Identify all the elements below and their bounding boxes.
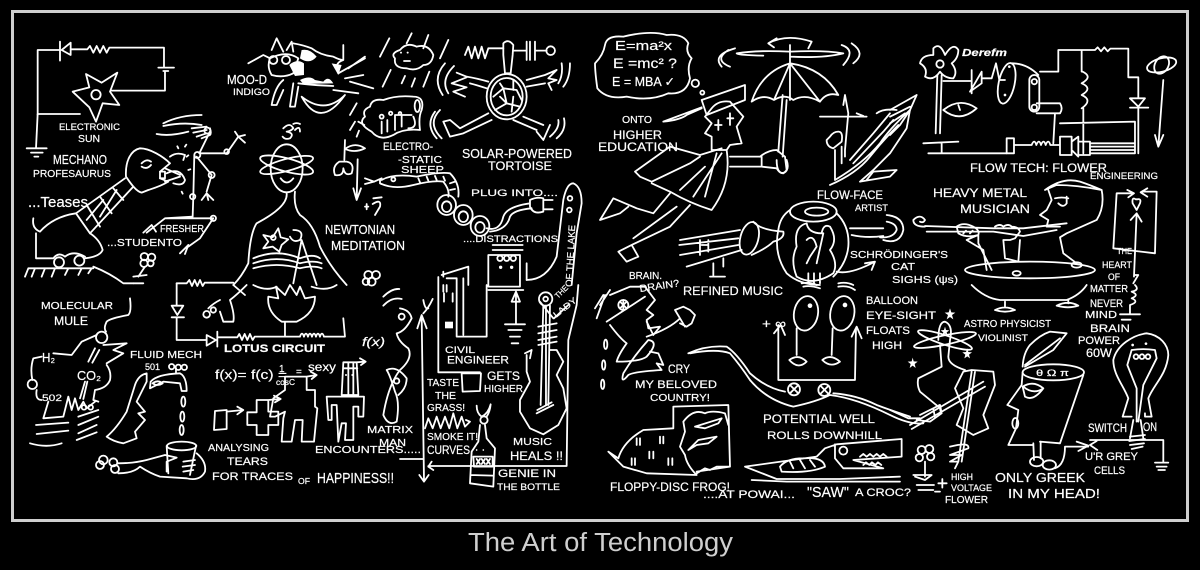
label: fluid mech: FLUID MECH	[130, 349, 202, 361]
label: high voltage flower: HIGH	[951, 472, 973, 482]
label: the heart of matter never mind: OF	[1108, 272, 1120, 283]
label: equations: E = MBA ✓	[612, 75, 675, 89]
panel: electronic sun	[27, 42, 174, 157]
icon: light bulb	[1090, 333, 1168, 470]
label: schrodinger's cat sighs: CAT	[891, 262, 915, 273]
label: electro-static sheep: -STATIC	[398, 155, 442, 166]
icon: cow	[248, 38, 373, 113]
panel: molecular mule	[28, 253, 155, 446]
panel: only greek in my head	[995, 332, 1100, 501]
label: genie in the bottle: THE BOTTLE	[497, 482, 560, 492]
label: teases: ...Teases	[28, 194, 88, 211]
icon: mule	[28, 298, 131, 446]
icon: lotus circuit wiring	[172, 280, 345, 347]
label: the heart of matter never mind: MATTER	[1090, 284, 1128, 295]
label: plus infinity: + ∞	[762, 316, 786, 331]
icon: flower circuit	[920, 46, 1178, 157]
panel: heart of matter	[1078, 188, 1157, 360]
label: mechano profesaurus: PROFESAURUS	[33, 168, 111, 180]
icon: snake plug	[365, 173, 553, 236]
icon: third figure	[270, 372, 317, 442]
panel: fluid mech	[96, 349, 394, 487]
label: music heals: HEALS !!	[510, 451, 563, 463]
label: at powai saw a croc	[703, 485, 911, 501]
label: astro physicist violinist: ASTRO PHYSICIST	[964, 319, 1051, 330]
panel: floppy-disc frog	[608, 405, 730, 494]
label: mood indigo	[227, 73, 270, 98]
label: analysing tears: TEARS	[227, 456, 268, 468]
icon: umbrella copter	[719, 38, 860, 173]
label: the heart of matter never mind: THE	[1117, 247, 1132, 256]
icon: matrix transformations	[214, 396, 281, 435]
label: brain drain: BRAIN.	[629, 270, 662, 282]
label: schrodinger's cat sighs: SIGHS (ψs)	[892, 274, 958, 286]
icon: star circuit	[27, 42, 174, 157]
label: of happiness	[298, 471, 394, 487]
label: civil engineer gets higher: CIVIL	[445, 345, 475, 355]
icon: small arrow	[837, 262, 875, 272]
label: electronic sun: ELECTRONIC	[59, 122, 120, 133]
label: flow tech flower engineering: FLOW TECH: FLOWER	[970, 163, 1107, 175]
label: brain power 60w	[1078, 323, 1130, 360]
label: balloon eye-sight floats high	[866, 295, 936, 352]
label: the heart of matter never mind: MIND	[1085, 310, 1117, 321]
label: flow-face artist	[817, 190, 888, 214]
label: taste the grass: SMOKE IT!	[427, 432, 478, 443]
label: heavy metal musician: HEAVY METAL	[933, 186, 1027, 200]
label: potential well rolls downhill: ROLLS DOWNHILL	[767, 430, 882, 442]
icon: coil and ground	[1120, 285, 1140, 320]
label: electronic sun	[59, 122, 120, 145]
label: fluid mech: 501	[145, 362, 160, 373]
label: refined music: REFINED MUSIC	[683, 286, 783, 298]
label: music heals: MUSIC	[513, 436, 552, 448]
label: electro-static sheep: SHEEP	[401, 164, 444, 176]
label: balloon eye-sight floats high: BALLOON	[866, 295, 918, 307]
label: only greek in my head: ONLY GREEK	[995, 470, 1085, 485]
label: matrix man encounters	[315, 424, 421, 456]
label: potential well rolls downhill: POTENTIAL WELL	[763, 412, 875, 426]
panel: refined music and cat	[629, 202, 1067, 298]
label: mechano profesaurus	[33, 153, 111, 180]
label: schrodinger's cat sighs: SCHRÖDINGER'S	[850, 249, 948, 261]
label: mood indigo: INDIGO	[233, 87, 270, 98]
label: civil engineer gets higher	[445, 345, 523, 395]
label: at powai saw a croc: "SAW"	[807, 485, 849, 501]
label: greek symbols: θ Ω π	[1036, 368, 1069, 378]
label: analysing tears: FOR TRACES	[212, 471, 293, 483]
label: at powai saw a croc: A CROC?	[855, 487, 911, 499]
panel: civil engineer and music	[425, 183, 582, 492]
label: molecular mule: MULE	[54, 316, 88, 328]
icon: frog	[608, 405, 730, 475]
label: newtonian meditation: MEDITATION	[331, 239, 405, 253]
label: lotus circuit: LOTUS CIRCUIT	[224, 343, 325, 355]
label: SO2: 502	[42, 393, 62, 404]
label: taste the grass	[427, 377, 478, 457]
icon: tortoise	[430, 41, 570, 140]
icon: thought cloud	[595, 33, 704, 99]
label: at powai saw a croc: ....AT POWAI...	[703, 489, 795, 501]
label: only greek in my head	[995, 470, 1100, 501]
label: heavy metal musician: MUSICIAN	[960, 202, 1030, 216]
icon: hand and brush	[820, 95, 910, 185]
panel: newtonian meditation	[172, 123, 405, 355]
label: only greek in my head: IN MY HEAD!	[1008, 486, 1100, 501]
icon: matrix man figure	[327, 358, 366, 442]
label: mechano profesaurus: MECHANO	[53, 153, 107, 167]
icon: y axis arrow	[400, 299, 433, 482]
label: the heart of matter never mind: NEVER	[1090, 298, 1123, 310]
label: equation	[215, 360, 336, 387]
icon: om	[283, 123, 300, 139]
icon: guitar on lake	[527, 183, 582, 285]
label: equation: 1	[279, 364, 285, 375]
label: of happiness: HAPPINESS!!	[317, 471, 394, 487]
panel: astro physicist violinist	[890, 308, 1051, 468]
icon: bowl base	[972, 285, 1087, 312]
label: ur grey cells: CELLS	[1094, 465, 1125, 477]
label: equation: sexy	[308, 360, 336, 374]
icon: crying figure	[595, 287, 695, 389]
icon: electro-static sheep	[350, 96, 422, 138]
label: onto higher education: EDUCATION	[598, 142, 678, 154]
label: genie in the bottle: GENIE IN	[498, 468, 556, 480]
icon: guitar	[428, 285, 578, 470]
label: plug into: PLUG INTO....	[471, 188, 558, 199]
label: brain power 60w: 60W	[1086, 348, 1112, 360]
icon: high voltage flower	[913, 445, 947, 492]
label: matrix man encounters: MATRIX	[367, 424, 413, 436]
icon: dinosaur	[25, 145, 190, 283]
label: civil engineer gets higher: HIGHER	[484, 384, 523, 395]
label: brain drain: DRAIN?	[639, 278, 680, 295]
icon: urn with cat	[777, 202, 883, 285]
icon: brush tip	[890, 95, 917, 135]
label: equations: E =mc² ?	[613, 55, 677, 71]
label: H2: H₂	[42, 350, 55, 365]
label: cry my beloved country: CRY	[668, 364, 690, 376]
label: the heart of matter never mind: HEART	[1102, 260, 1132, 271]
title: The Art of Technology	[468, 529, 733, 557]
label: potential well rolls downhill	[763, 412, 882, 442]
panel: balloon eye-sight and potential well	[688, 283, 936, 442]
label: ur grey cells: U'R GREY	[1085, 451, 1139, 463]
icon: trumpet and notes	[679, 220, 784, 277]
label: onto higher education	[598, 115, 678, 154]
label: cry my beloved country: MY BELOVED	[635, 379, 717, 391]
panel: brain drain face	[595, 287, 717, 404]
label: cry my beloved country	[635, 364, 717, 404]
label: equations: E=ma²x	[615, 38, 673, 53]
label: electro-static sheep: ELECTRO-	[383, 141, 433, 153]
label: CO2: CO₂	[77, 368, 101, 383]
label: matrix man encounters: MAN	[379, 438, 406, 449]
label: astro physicist violinist	[964, 319, 1051, 344]
label: f(x): f(x)	[362, 335, 385, 349]
panel: higher education	[595, 33, 860, 262]
label: floppy-disc frog: FLOPPY-DISC FROG!	[610, 480, 730, 494]
label: onto higher education: ONTO	[622, 115, 652, 126]
icon: violinist	[890, 308, 995, 468]
label: brain drain	[629, 270, 680, 295]
label: balloon eye-sight floats high: FLOATS	[866, 325, 910, 337]
icon: rain cloud	[380, 33, 448, 87]
label: balloon eye-sight floats high: HIGH	[872, 340, 902, 352]
label: newtonian meditation	[325, 223, 405, 253]
icon: crocodile	[745, 439, 902, 482]
label: equation: f(x)= f(c) =	[215, 367, 287, 382]
label: switch on: ON	[1143, 422, 1157, 434]
label: distractions: ....DISTRACTIONS	[463, 234, 558, 245]
label: astro physicist violinist: VIOLINIST	[978, 333, 1028, 344]
label: molecular mule: MOLECULAR	[41, 300, 113, 312]
label: taste the grass: THE	[435, 391, 456, 402]
label: the lady of the lake	[551, 225, 579, 320]
label: switch on: SWITCH	[1088, 423, 1127, 435]
label: equations	[612, 38, 677, 89]
small flower with stem	[133, 253, 155, 283]
label: electro-static sheep	[383, 141, 444, 176]
icon: potential well curves	[688, 346, 923, 424]
panel: heavy metal musician	[933, 180, 1103, 312]
label: fresher: FRESHER	[160, 223, 204, 235]
icon: tap and tears	[107, 364, 187, 443]
label: high voltage flower	[945, 472, 992, 506]
panel: solar-powered tortoise	[365, 41, 572, 245]
label: flow-face artist: FLOW-FACE	[817, 190, 883, 202]
label: equation: cosC	[276, 377, 295, 387]
label: solar-powered tortoise: TORTOISE	[488, 159, 552, 173]
panel: cow and clouds	[227, 33, 448, 176]
icon: head with lid	[1007, 332, 1088, 470]
label: equation: =	[296, 367, 302, 378]
label: flow-face artist: ARTIST	[855, 203, 888, 214]
icon: lotus and lap	[203, 285, 337, 337]
icon: cherries and gravity arrow	[334, 140, 382, 215]
label: newtonian meditation: NEWTONIAN	[325, 223, 395, 237]
label: flow tech flower engineering: ENGINEERING	[1090, 171, 1158, 181]
label: flow tech flower engineering	[970, 163, 1158, 181]
icon: grass zigzag and square	[425, 373, 481, 428]
panel: mechano profesaurus	[25, 115, 245, 283]
panel: flow-face artist	[817, 95, 917, 214]
label: cry my beloved country: COUNTRY!	[650, 392, 710, 404]
panel: matrix man	[214, 289, 433, 482]
icon: ground symbol	[488, 290, 525, 343]
panel: flow tech flower engineering	[920, 46, 1178, 181]
label: taste the grass: TASTE	[427, 377, 459, 389]
label: onto higher education: HIGHER	[613, 128, 662, 142]
label: the lady of the lake: OF THE LAKE	[564, 225, 578, 287]
label: analysing tears	[208, 442, 293, 483]
label: matrix man encounters: ENCOUNTERS.....	[315, 445, 421, 456]
label: schrodinger's cat sighs	[850, 249, 958, 286]
icon: pipe loop to musician	[880, 215, 1067, 241]
label: the heart of matter never mind	[1085, 247, 1132, 321]
icon: stick figure fresher	[143, 115, 245, 254]
label: the lady of the lake: LADY	[551, 295, 579, 320]
icon: musician in bowl	[957, 180, 1103, 278]
icon: balloons on cart	[774, 283, 862, 396]
label: high voltage flower: FLOWER	[945, 495, 988, 506]
label: heavy metal musician	[933, 186, 1030, 216]
label: switch on	[1088, 422, 1157, 435]
icon: meditating figure	[233, 144, 347, 285]
label: solar-powered tortoise	[462, 147, 572, 173]
label: of happiness: OF	[298, 476, 310, 486]
icon: flying graduate	[600, 85, 787, 262]
label: analysing tears: ANALYSING	[208, 442, 269, 454]
label: molecular mule	[41, 300, 113, 328]
panel: switch on light bulb	[1085, 333, 1168, 477]
label: derefm: Derefm	[962, 47, 1007, 59]
label: electronic sun: SUN	[78, 133, 100, 145]
icon: hand with cup	[96, 442, 205, 479]
icon: heart circuit	[1113, 188, 1157, 283]
icon: building	[438, 267, 487, 372]
label: brain power 60w: POWER	[1078, 335, 1120, 347]
label: ur grey cells	[1085, 451, 1139, 477]
small flower at hand	[363, 271, 380, 286]
label: taste the grass: GRASS!	[427, 403, 465, 414]
panel: crocodile	[703, 439, 992, 506]
label: high voltage flower: VOLTAGE	[951, 483, 992, 493]
label: taste the grass: CURVES	[427, 445, 470, 457]
label: solar-powered tortoise: SOLAR-POWERED	[462, 147, 572, 161]
label: brain power 60w: BRAIN	[1090, 323, 1130, 335]
label: fluid mech	[130, 349, 202, 373]
label: mood indigo: MOO-D	[227, 73, 267, 87]
icon: genie bottle	[470, 404, 495, 487]
label: studento: ...STUDENTO	[107, 238, 182, 249]
label: civil engineer gets higher: GETS	[487, 371, 520, 383]
icon: control box and ground	[488, 245, 527, 287]
label: the lady of the lake: THE	[553, 283, 570, 300]
label: genie in the bottle	[497, 468, 560, 492]
label: music heals	[510, 436, 563, 463]
label: balloon eye-sight floats high: EYE-SIGHT	[866, 310, 936, 322]
label: civil engineer gets higher: ENGINEER	[447, 354, 509, 366]
icon: squiggle curve	[383, 289, 412, 423]
